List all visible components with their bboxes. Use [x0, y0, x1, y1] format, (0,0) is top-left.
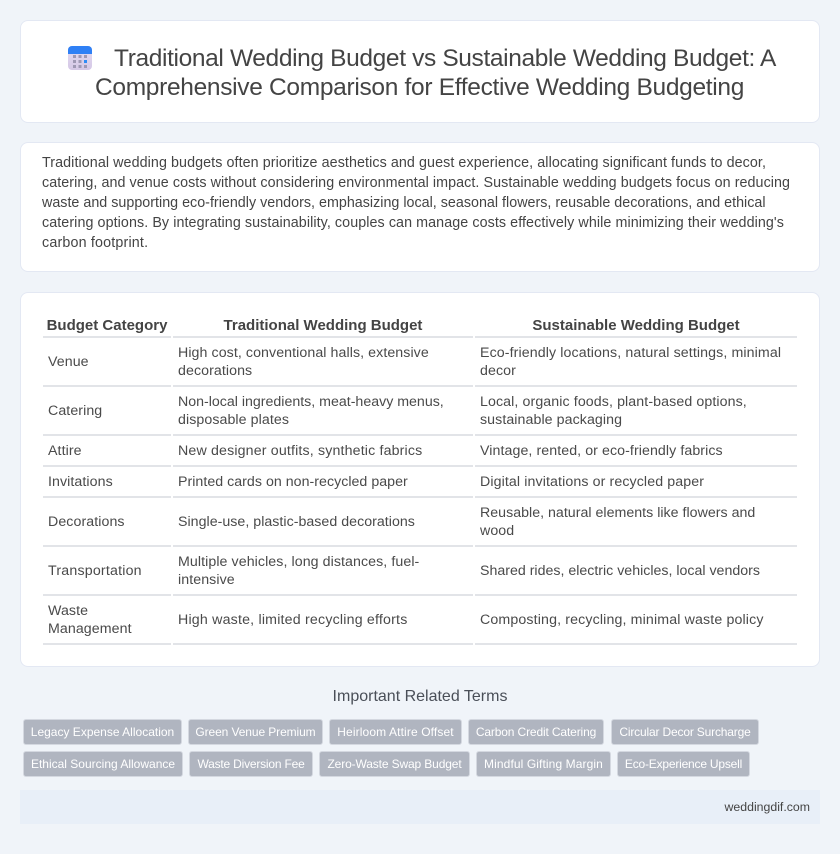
row: transportation: Transportation — [48, 563, 142, 579]
row: venue: High cost, conventional halls, extensive — [178, 345, 429, 361]
row: decorations — [48, 505, 755, 539]
related term tags: Zero-Waste Swap Budget — [327, 757, 462, 771]
related term tags: Heirloom Attire Offset — [337, 725, 454, 739]
intro text — [42, 155, 790, 251]
footer site name: weddingdif.com — [725, 800, 810, 814]
row: waste management: Management — [48, 621, 132, 637]
related term tags: Mindful Gifting Margin — [484, 757, 603, 771]
row: attire: Vintage, rented, or eco-friendly fabrics — [480, 443, 723, 459]
row: decorations: Reusable, natural elements like flowers and — [480, 505, 755, 521]
intro card — [20, 142, 820, 272]
related term tags: Waste Diversion Fee — [197, 757, 305, 771]
intro text: catering options. By integrating sustainability, couples can manage costs effectively while minimizing their wedding's — [42, 215, 784, 231]
related term tags: Eco-Experience Upsell — [625, 757, 742, 771]
row: catering: Catering — [48, 403, 102, 419]
row: catering: Non-local ingredients, meat-heavy menus, — [178, 394, 444, 410]
row: catering: disposable plates — [178, 412, 289, 428]
row: waste management: Composting, recycling, minimal waste policy — [480, 612, 764, 628]
row: transportation: intensive — [178, 572, 235, 588]
table header: Budget Category — [47, 317, 167, 334]
related term tags: Green Venue Premium — [195, 725, 316, 739]
row: waste management: Waste — [48, 603, 88, 619]
row: waste management — [48, 603, 764, 637]
related terms heading: Important Related Terms — [333, 688, 507, 705]
row: decorations: wood — [480, 523, 514, 539]
row: invitations: Invitations — [48, 474, 113, 490]
table card — [20, 292, 820, 667]
row: transportation: Shared rides, electric vehicles, local vendors — [480, 563, 760, 579]
row: decorations: Decorations — [48, 514, 125, 530]
related term tags: Legacy Expense Allocation — [31, 725, 174, 739]
intro text: carbon footprint. — [42, 235, 148, 251]
related term tags: Ethical Sourcing Allowance — [31, 757, 175, 771]
row: venue: Venue — [48, 354, 89, 370]
related term tags: Carbon Credit Catering — [476, 725, 596, 739]
icon: calendar — [68, 46, 92, 70]
header card — [20, 20, 820, 123]
row: attire: New designer outfits, synthetic fabrics — [178, 443, 422, 459]
row: catering: Local, organic foods, plant-based options, — [480, 394, 747, 410]
row: venue: decor — [480, 363, 516, 379]
title: Traditional Wedding Budget vs Sustainable Wedding Budget: A — [114, 45, 776, 72]
row: transportation: Multiple vehicles, long distances, fuel- — [178, 554, 419, 570]
title — [95, 45, 776, 101]
row: venue: decorations — [178, 363, 252, 379]
row: catering — [48, 394, 747, 428]
row: invitations — [48, 474, 704, 490]
intro text: waste and supporting eco-friendly vendors, emphasizing local, seasonal flowers, reusable decorations, and ethical — [42, 195, 766, 211]
row: venue — [48, 345, 781, 379]
table header: Sustainable Wedding Budget — [532, 317, 740, 334]
row: attire — [48, 443, 723, 459]
table header: Traditional Wedding Budget — [224, 317, 422, 334]
table header — [47, 317, 740, 334]
footer — [20, 790, 820, 824]
comparison table — [43, 317, 797, 645]
row: venue: Eco-friendly locations, natural settings, minimal — [480, 345, 781, 361]
row: attire: Attire — [48, 443, 82, 459]
related term tags: Circular Decor Surcharge — [619, 725, 751, 739]
intro text: Traditional wedding budgets often prioritize aesthetics and guest experience, allocating significant funds to decor, — [42, 155, 766, 171]
related term tags — [23, 719, 759, 777]
row: catering: sustainable packaging — [480, 412, 622, 428]
title: Comprehensive Comparison for Effective Wedding Budgeting — [95, 74, 744, 101]
row: invitations: Digital invitations or recycled paper — [480, 474, 704, 490]
row: waste management: High waste, limited recycling efforts — [178, 612, 408, 628]
row: transportation — [48, 554, 760, 588]
row: invitations: Printed cards on non-recycled paper — [178, 474, 408, 490]
row: decorations: Single-use, plastic-based decorations — [178, 514, 415, 530]
intro text: catering, and venue costs without considering environmental impact. Sustainable wedding budgets focus on reducing — [42, 175, 790, 191]
